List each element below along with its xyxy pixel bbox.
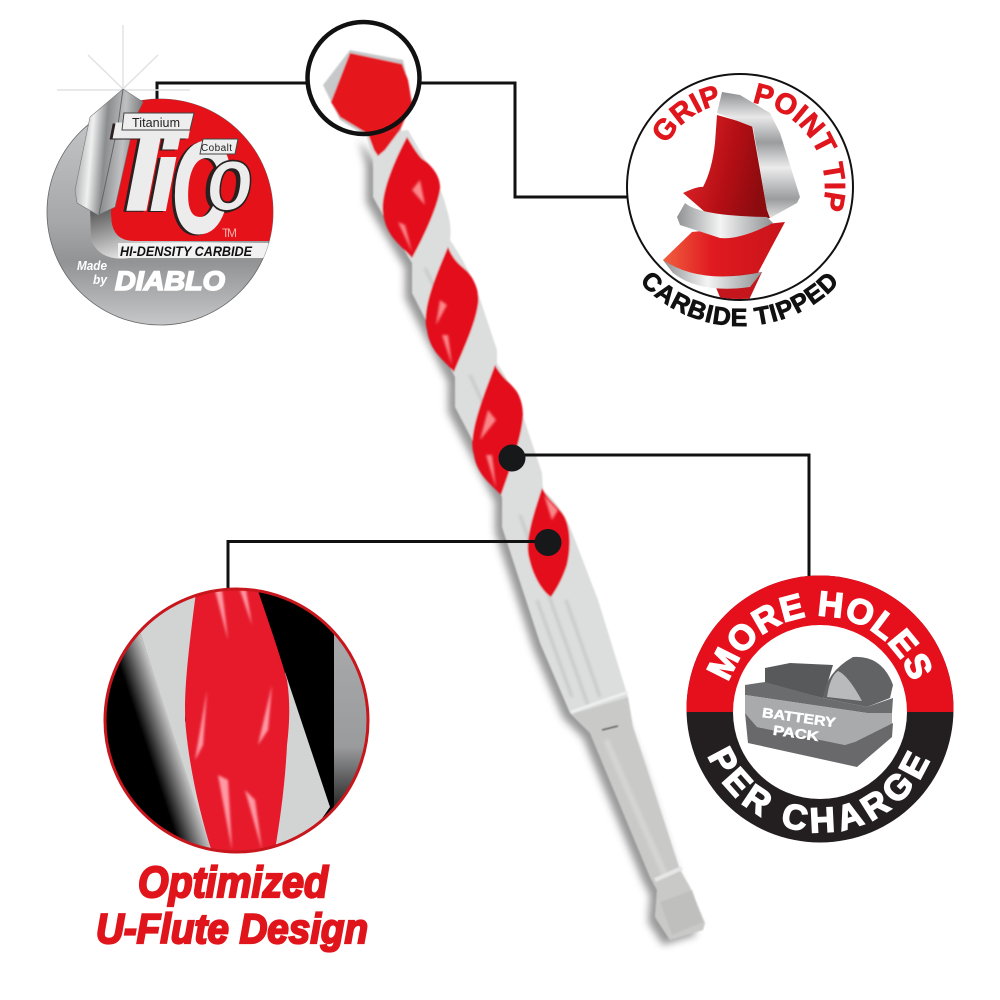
by: by — [93, 272, 108, 287]
line: tip to TiCo badge — [157, 83, 306, 101]
shank groove — [655, 868, 682, 880]
flute streaks — [195, 590, 272, 850]
flute 2 — [426, 247, 479, 372]
U-Flute Design: U-Flute Design — [96, 905, 368, 952]
GRIP: GRIP — [654, 86, 718, 140]
letter i: i — [150, 121, 179, 231]
bottom red — [716, 272, 762, 299]
hex shank end — [660, 890, 703, 935]
closeup background — [106, 590, 368, 852]
sparkle — [57, 25, 190, 90]
inner white circle — [733, 625, 907, 799]
tip red face — [331, 53, 412, 134]
TM: TM — [222, 226, 237, 240]
callout dot: flute — [534, 529, 562, 556]
dark disc — [686, 576, 954, 842]
PER CHARGE: PER CHARGE — [707, 745, 930, 834]
letter o: o — [207, 128, 253, 230]
bit icon — [75, 89, 143, 215]
shaft texture — [425, 268, 665, 875]
BATTERY label: BATTERY — [761, 705, 837, 730]
red flute — [185, 585, 289, 852]
left grey band — [140, 597, 207, 836]
Made by: Made — [77, 258, 107, 273]
Optimized: Optimized — [138, 858, 329, 907]
leader lines — [157, 83, 809, 590]
density strip — [118, 243, 275, 258]
badge: TiCo carbide — [47, 25, 280, 325]
silver ring — [677, 203, 773, 238]
Cobalt label: Cobalt — [201, 143, 232, 154]
HI-DENSITY CARBIDE: HI-DENSITY CARBIDE — [120, 243, 253, 259]
callout dot: battery — [498, 444, 526, 472]
bit illustration — [663, 92, 800, 302]
TiCo letters — [105, 98, 253, 260]
MORE HOLES: MORE HOLES — [706, 590, 932, 681]
line: flute to battery badge — [512, 455, 809, 580]
Titanium plate — [122, 113, 194, 130]
badge: grip point tip — [626, 73, 854, 326]
flute 1 — [383, 137, 440, 258]
badge: more holes per charge — [686, 576, 954, 842]
carbide tip — [717, 92, 800, 218]
upper red body — [683, 115, 770, 225]
drill shadow — [359, 140, 696, 945]
Titanium label: Titanium — [132, 116, 180, 130]
battery lid — [765, 663, 833, 698]
badge: U-flute closeup — [105, 585, 374, 865]
line: tip to grip point badge — [420, 83, 628, 197]
flute highlights — [398, 180, 558, 520]
hex shank — [572, 697, 705, 940]
CARBIDE TIPPED: CARBIDE TIPPED — [642, 272, 836, 326]
steel ring — [90, 205, 272, 259]
battery dome — [823, 657, 893, 707]
lower silver band — [663, 260, 762, 289]
closeup ring — [105, 589, 368, 852]
battery mid panel — [745, 695, 892, 745]
badge circle — [627, 74, 853, 300]
POINT TIP: POINT TIP — [754, 82, 846, 212]
flute 3 — [472, 365, 523, 495]
right grey band — [272, 672, 330, 850]
tip neck — [368, 130, 400, 156]
PACK label: PACK — [772, 723, 820, 744]
flute 4 — [528, 488, 570, 597]
drill bit — [323, 50, 705, 945]
lower red body — [663, 222, 785, 276]
Cobalt plate — [200, 139, 238, 154]
shaft — [366, 130, 705, 940]
collar mark — [602, 726, 618, 730]
letter T: T — [105, 98, 191, 237]
grey disc — [47, 99, 273, 325]
red half — [686, 576, 954, 712]
battery icon — [745, 657, 893, 767]
battery lower shell — [745, 713, 893, 767]
battery window — [827, 671, 862, 701]
red panel — [111, 98, 280, 241]
letter C: C — [172, 117, 229, 260]
far right panel — [334, 634, 366, 806]
collar edge — [571, 692, 628, 712]
battery top band — [745, 682, 893, 713]
callout ring on tip — [308, 22, 420, 134]
DIABLO: DIABLO — [115, 266, 225, 296]
line: flute to U-flute badge — [228, 542, 548, 590]
heading: Optimized U-Flute Design — [96, 858, 368, 952]
bit facet lines — [99, 89, 123, 214]
left shade — [120, 633, 211, 848]
tip silver rim — [323, 50, 412, 137]
